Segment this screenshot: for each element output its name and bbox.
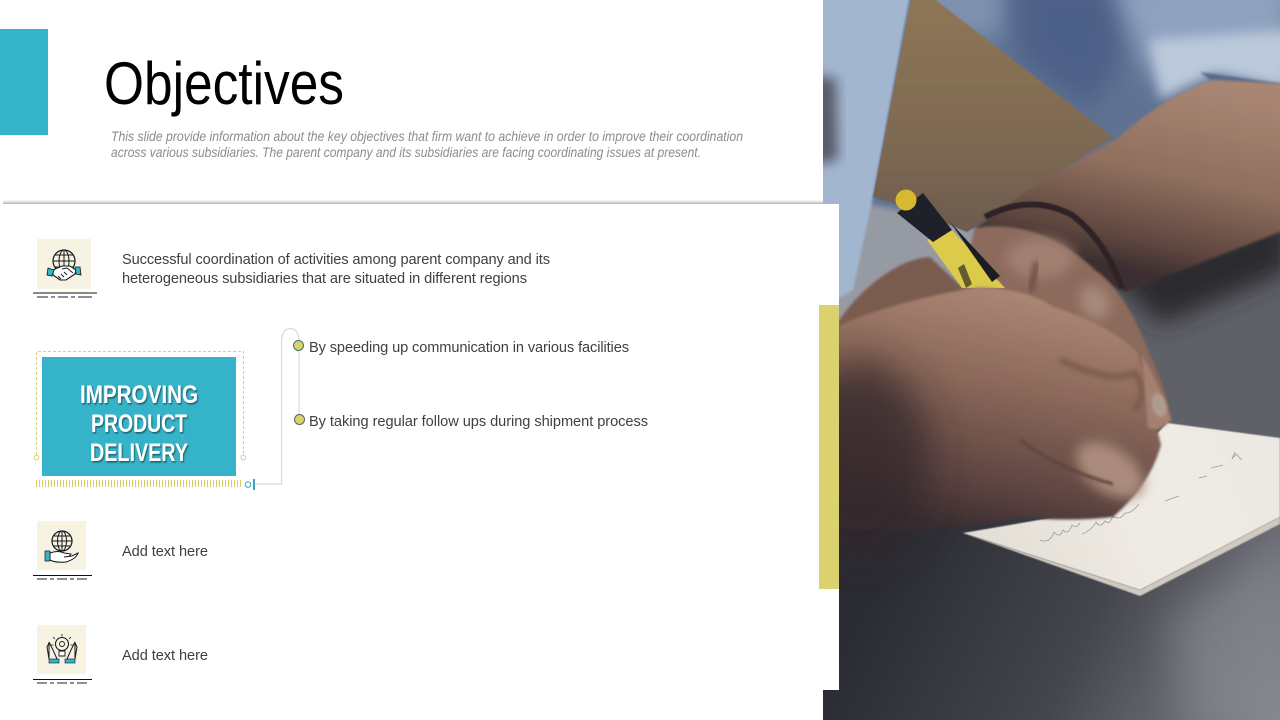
back of hand [960,226,1171,432]
panel shadow [3,200,823,204]
title: Objectives [104,50,344,117]
desk behind the hand [839,202,976,324]
description: This slide provide information about the key objectives that firm want to achieve in order to improve their coordination [111,129,743,144]
objective text 2: Add text here [122,544,208,560]
callout: improving product delivery [34,352,246,484]
bullet marker 2 [294,414,304,424]
icon: globe handshake [33,239,97,297]
teal accent block [0,29,48,135]
white content panel [0,204,839,690]
shirt [871,0,1280,234]
fist shading [839,340,947,515]
desk, lower [823,516,1280,720]
cardboard [873,0,1113,232]
desk, right [1278,233,1280,240]
paper note [963,423,1280,596]
photo: hand writing with a yellow pen on a note [790,0,1280,720]
bullet text 1: By speeding up communication in various facilities [309,340,629,356]
yellow pen [896,190,1005,288]
bracelet [985,204,1122,288]
yellow accent bar [819,305,839,589]
icon: globe in hand [33,521,92,579]
objective text 1: heterogeneous subsidiaries that are situated in different regions [122,271,527,287]
description: across various subsidiaries. The parent company and its subsidiaries are facing coordinating issues at present. [111,145,701,160]
description [111,129,743,160]
callout: improving product delivery: DELIVERY [90,439,188,467]
objective text 1 [122,252,550,287]
connector from callout to bullets [245,328,299,490]
left sleeve [823,0,910,299]
callout: improving product delivery: IMPROVING [80,381,198,409]
thumb tip [1142,355,1171,429]
bullet marker 1 [294,340,304,350]
left fingers [839,256,964,328]
bullet text 2: By taking regular follow ups during shipment process [309,414,648,430]
callout: improving product delivery: PRODUCT [91,410,187,438]
forearm [975,80,1280,292]
fist [838,287,1161,530]
objective text 3: Add text here [122,648,208,664]
icon: hands holding light bulb [33,625,92,683]
objective text 1: Successful coordination of activities among parent company and its [122,252,550,268]
